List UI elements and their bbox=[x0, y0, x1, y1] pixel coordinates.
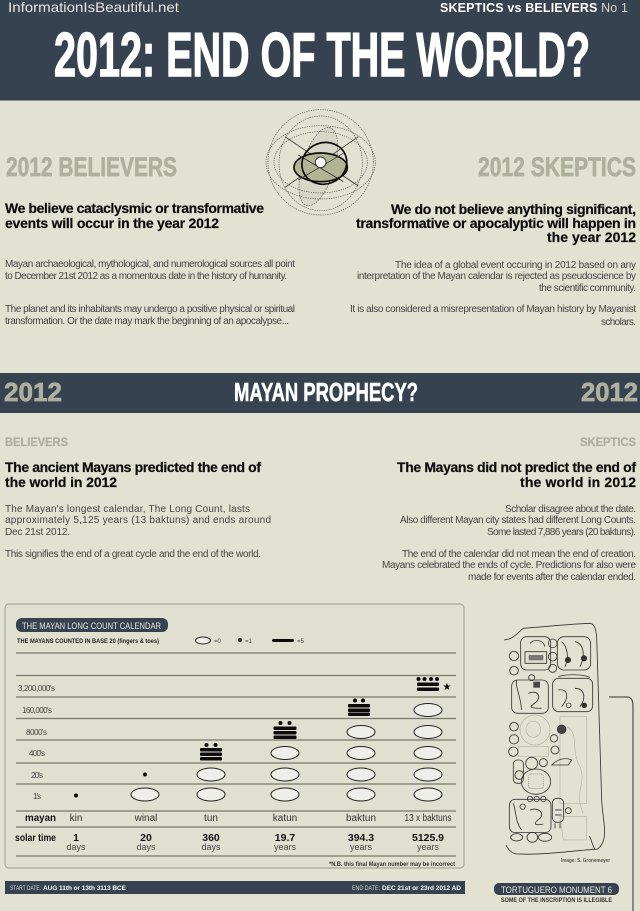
row labels: 20's bbox=[31, 771, 43, 780]
heading: 2012 believers: 2012 BELIEVERS bbox=[6, 152, 177, 182]
numeral: winal one bbox=[143, 772, 147, 776]
left year: 2012 bbox=[4, 377, 62, 407]
side dark glyphs bbox=[509, 722, 572, 783]
text: made for events after the calendar ended. bbox=[468, 572, 636, 583]
calendar title pill: THE MAYAN LONG COUNT CALENDAR bbox=[22, 621, 161, 632]
numeral: thirteen baktuns with star: ★ bbox=[443, 682, 452, 693]
text: Mayans celebrated the ends of cycle. Predictions for also were bbox=[382, 560, 636, 571]
upper glyphs bbox=[509, 637, 593, 713]
numeral: tun seventeen bbox=[200, 743, 222, 760]
row: solar time: days bbox=[136, 842, 156, 852]
claim: The Mayans did not predict the end of bbox=[397, 459, 636, 475]
legend: =0 bbox=[214, 639, 222, 645]
skeptics claim: transformative or apocalyptic will happen in bbox=[356, 215, 636, 231]
legend: =1 bbox=[245, 639, 253, 645]
row: solar time: years bbox=[417, 842, 440, 852]
row: mayan names: kin bbox=[70, 813, 82, 824]
text: Some lasted 7,886 years (20 baktuns). bbox=[487, 527, 636, 538]
text: The Mayan's longest calendar, The Long Count, lasts bbox=[5, 504, 250, 515]
numeral: baktun seventeen bbox=[348, 698, 370, 716]
claim: the world in 2012 bbox=[5, 474, 117, 490]
panel: believers prophecy bbox=[5, 435, 271, 560]
text: approximately 5,125 years (13 baktuns) and ends around bbox=[5, 515, 271, 526]
legend bbox=[196, 637, 305, 645]
row: mayan names: tun bbox=[204, 813, 218, 824]
start date: START DATE: bbox=[10, 885, 41, 892]
icon: orbital emblem bbox=[266, 110, 375, 215]
row labels bbox=[18, 684, 55, 801]
monument drawing: tortuguero monument 6 bbox=[504, 623, 605, 854]
row labels: 160,000's bbox=[22, 706, 52, 715]
label: skeptics: SKEPTICS bbox=[580, 435, 636, 449]
skeptics claim: the year 2012 bbox=[547, 229, 636, 245]
row labels: 8000's bbox=[26, 728, 47, 737]
skeptics text: The idea of a global event occuring in 2012 based on any bbox=[395, 260, 636, 271]
row: mayan names: 13 x baktuns bbox=[404, 813, 452, 824]
believers text: The planet and its inhabitants may undergo a positive physical or spiritual bbox=[5, 304, 295, 315]
believers text: Mayan archaeological, mythological, and numerological sources all point bbox=[5, 259, 295, 270]
row: mayan names: mayan bbox=[25, 812, 56, 824]
row: solar time: 19.7 bbox=[275, 832, 295, 844]
text: The end of the calendar did not mean the end of creation. bbox=[402, 549, 636, 560]
header banner bbox=[0, 0, 640, 101]
base 20 note: THE MAYANS COUNTED IN BASE 20 (fingers & toes) bbox=[17, 639, 159, 645]
end date: DEC 21st or 23rd 2012 AD bbox=[382, 885, 461, 892]
row: solar time: years bbox=[274, 842, 296, 852]
row: solar time: years bbox=[350, 842, 372, 852]
numeral: katun seventeen bbox=[274, 721, 296, 739]
calendar title pill bbox=[16, 618, 168, 632]
faded middle glyphs bbox=[518, 715, 587, 840]
mayan numerals: zeros bbox=[131, 704, 442, 801]
monument note: SOME OF THE INSCRIPTION IS ILLEGIBLE bbox=[501, 898, 612, 904]
skeptics text: It is also considered a misrepresentation of Mayan history by Mayanist bbox=[350, 304, 636, 315]
row: solar time bbox=[15, 832, 444, 852]
row: mayan names: winal bbox=[134, 813, 157, 824]
row: solar time: 20 bbox=[140, 832, 152, 844]
start date: AUG 11th or 13th 3113 BCE bbox=[43, 885, 127, 892]
footnote: *N.B. this final Mayan number may be incorrect bbox=[329, 862, 455, 868]
row: solar time: 1 bbox=[73, 832, 79, 844]
believers text: transformation. Or the date may mark the beginning of an apocalypse... bbox=[5, 316, 289, 327]
row: solar time: 394.3 bbox=[348, 832, 374, 844]
date bar bbox=[5, 881, 465, 894]
believers claim: events will occur in the year 2012 bbox=[5, 215, 219, 231]
panel: believers intro bbox=[5, 152, 295, 327]
claim: the world in 2012 bbox=[520, 474, 636, 490]
right year: 2012 bbox=[581, 377, 638, 407]
text: Scholar disagree about the date. bbox=[505, 504, 636, 515]
panel: skeptics intro bbox=[350, 152, 636, 328]
row labels: 1's bbox=[33, 792, 41, 801]
text: Dec 21st 2012. bbox=[5, 527, 70, 538]
row: mayan names: baktun bbox=[346, 813, 376, 824]
row: solar time: 5125.9 bbox=[412, 832, 444, 844]
row labels: 3,200,000's bbox=[18, 684, 55, 693]
end date: END DATE: bbox=[352, 885, 380, 892]
row: mayan names: katun bbox=[273, 813, 297, 824]
label: believers: BELIEVERS bbox=[5, 435, 68, 449]
monument caption: TORTUGUERO MONUMENT 6 bbox=[501, 885, 612, 896]
row: solar time: days bbox=[201, 842, 221, 852]
text: Also different Mayan city states had different Long Counts. bbox=[400, 515, 636, 526]
row: solar time: days bbox=[66, 842, 86, 852]
claim: The ancient Mayans predicted the end of bbox=[5, 459, 261, 475]
monument caption bbox=[494, 883, 619, 904]
lower glyphs bbox=[509, 769, 571, 842]
skeptics text: the scientific community. bbox=[539, 283, 636, 294]
skeptics text: scholars. bbox=[601, 317, 636, 328]
skeptics claim: We do not believe anything significant, bbox=[391, 201, 636, 217]
legend: =5 bbox=[297, 639, 305, 645]
believers text: to December 21st 2012 as a momentous date in the history of humanity. bbox=[5, 271, 287, 282]
connector line bbox=[609, 697, 633, 911]
believers claim: We believe cataclysmic or transformative bbox=[5, 200, 264, 216]
section title: MAYAN PROPHECY? bbox=[234, 377, 418, 407]
panel: skeptics prophecy bbox=[382, 435, 636, 583]
row labels: 400's bbox=[29, 749, 45, 758]
text: This signifies the end of a great cycle and the end of the world. bbox=[5, 549, 261, 560]
numeral: thirteen baktuns with star bbox=[416, 677, 452, 693]
section banner: mayan prophecy bbox=[0, 373, 640, 413]
series label: SKEPTICS vs BELIEVERS No 1 bbox=[440, 1, 628, 15]
skeptics text: interpretation of the Mayan calendar is rejected as pseudoscience by bbox=[357, 271, 636, 282]
stone outline bbox=[504, 623, 605, 854]
image credit: Image: S. Gronemeyer bbox=[561, 858, 611, 864]
panel: mayan long count calendar bbox=[5, 604, 464, 868]
row: solar time: 360 bbox=[202, 832, 220, 844]
row: mayan names bbox=[25, 812, 452, 824]
row: solar time: solar time bbox=[15, 833, 56, 844]
numeral: kin one bbox=[74, 794, 78, 798]
